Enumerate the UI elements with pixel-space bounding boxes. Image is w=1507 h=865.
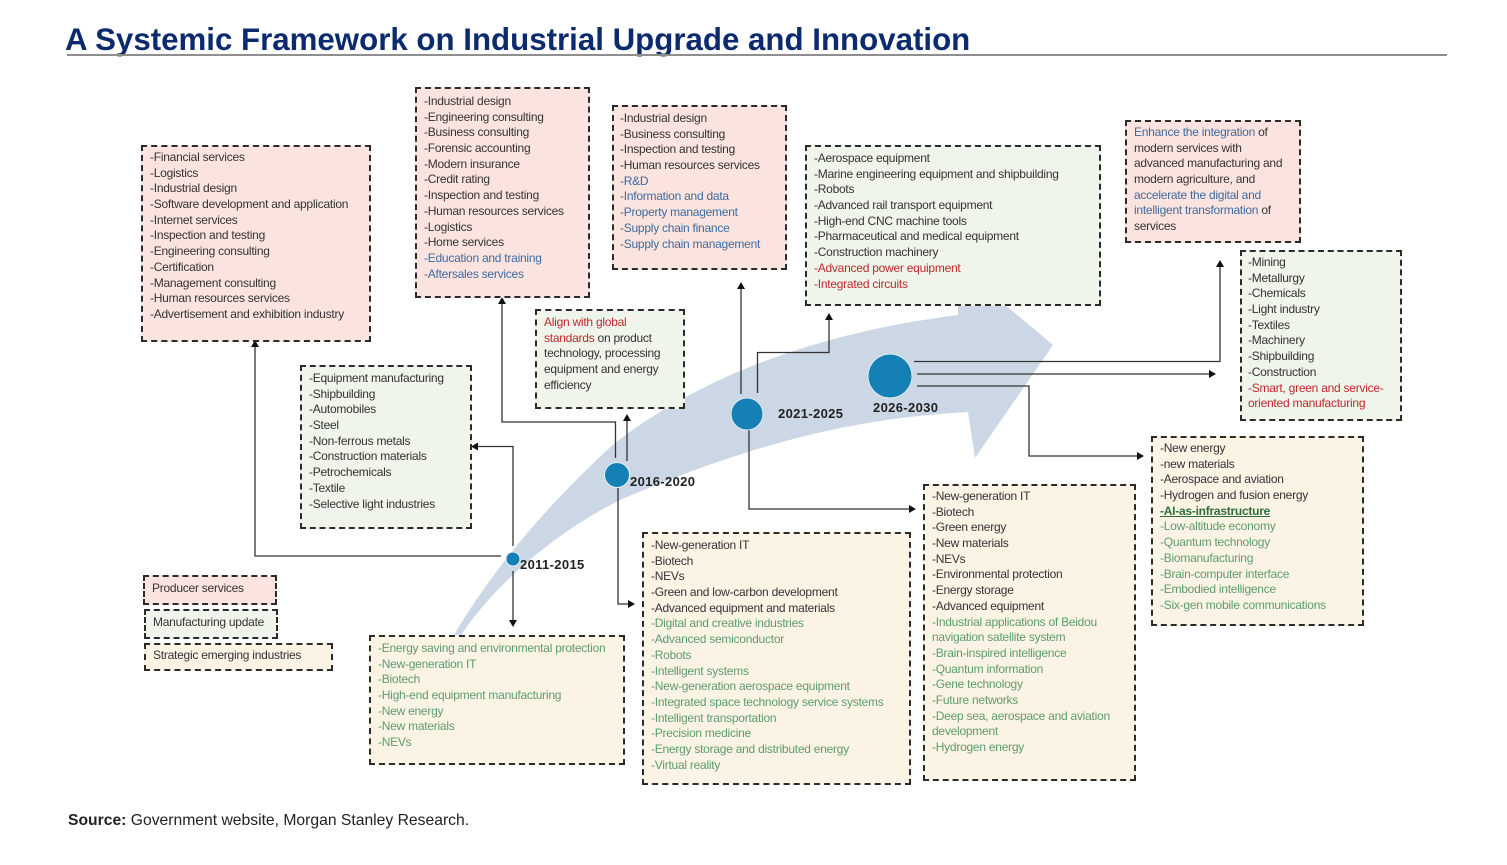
panel: strategic emerging industries 2026-2030: -Aerospace and aviation: [1160, 472, 1284, 486]
panel: producer services 2021-2025: [612, 105, 787, 270]
panel: manufacturing update 2026-2030: -Machinery: [1248, 333, 1305, 347]
panel: manufacturing update 2011-2015: -Equipment manufacturing: [309, 371, 444, 385]
panel: manufacturing update 2021-2025: -Marine engineering equipment and shipbuilding: [814, 167, 1059, 181]
panel: strategic emerging industries 2026-2030: -Hydrogen and fusion energy: [1160, 488, 1308, 502]
panel: strategic emerging industries 2026-2030: -Brain-computer interface: [1160, 566, 1289, 580]
arrowheads: [251, 260, 1224, 627]
panel: strategic emerging industries 2021-2025: -Advanced equipment: [932, 599, 1044, 613]
panel: strategic emerging industries 2011-2015: -New materials: [378, 719, 455, 733]
panel: producer services 2021-2025: -Business consulting: [620, 127, 725, 141]
panel: strategic emerging industries 2016-2020: -Robots: [651, 648, 691, 662]
panel: manufacturing update 2026-2030: -Light industry: [1248, 302, 1320, 316]
panel: strategic emerging industries 2016-2020: -Intelligent systems: [651, 664, 749, 678]
panel: strategic emerging industries 2021-2025: -Deep sea, aerospace and aviation: [932, 709, 1110, 723]
legend: manufacturing update: Manufacturing update: [153, 615, 264, 629]
panel: producer services 2026-2030: Enhance the integration of: [1134, 125, 1268, 139]
panel: producer services 2016-2020: -Modern insurance: [424, 157, 520, 171]
panel: manufacturing update 2021-2025: -Robots: [814, 182, 854, 196]
panel: strategic emerging industries 2026-2030: -Low-altitude economy: [1160, 519, 1275, 533]
panel: producer services 2016-2020: -Business consulting: [424, 125, 529, 139]
panel: producer services 2021-2025: -Property management: [620, 205, 738, 219]
panel: strategic emerging industries 2021-2025: -New-generation IT: [932, 489, 1030, 503]
panel: strategic emerging industries 2016-2020: -NEVs: [651, 569, 684, 583]
panel: manufacturing update 2021-2025: -Construction machinery: [814, 245, 938, 259]
big curved timeline arrow: [453, 303, 1053, 637]
panel: strategic emerging industries 2021-2025: -Energy storage: [932, 583, 1014, 597]
panel: strategic emerging industries 2016-2020: -Digital and creative industries: [651, 616, 804, 630]
panel: producer services 2016-2020: -Engineering consulting: [424, 110, 544, 124]
panel: strategic emerging industries 2021-2025: -Quantum information: [932, 662, 1043, 676]
panel: producer services 2016-2020: [415, 87, 590, 298]
panel: strategic emerging industries 2011-2015: -New energy: [378, 704, 443, 718]
panel: strategic emerging industries 2026-2030: -new materials: [1160, 457, 1235, 471]
panel: strategic emerging industries 2026-2030: [1151, 436, 1364, 626]
panel: producer services 2021-2025: -Supply chain management: [620, 236, 760, 250]
panel: strategic emerging industries 2011-2015: -High-end equipment manufacturing: [378, 688, 561, 702]
panel: producer services 2011-2015: -Engineering consulting: [150, 244, 270, 258]
panel: producer services 2016-2020: -Industrial design: [424, 94, 511, 108]
panel: strategic emerging industries 2011-2015: -NEVs: [378, 735, 411, 749]
panel: manufacturing update 2011-2015: -Petrochemicals: [309, 465, 391, 479]
panel: manufacturing update 2026-2030: -Construction: [1248, 365, 1316, 379]
panel: producer services 2021-2025: -Information and data: [620, 189, 729, 203]
panel: strategic emerging industries 2026-2030: -Six-gen mobile communications: [1160, 598, 1326, 612]
source note: Source: Government website, Morgan Stanley Research.: [68, 812, 469, 829]
panel: strategic emerging industries 2016-2020: -Integrated space technology service systems: [651, 695, 883, 709]
panel: strategic emerging industries 2016-2020: -Biotech: [651, 554, 693, 568]
panel: strategic emerging industries 2016-2020: -New-generation IT: [651, 538, 749, 552]
panel: strategic emerging industries 2016-2020: -Virtual reality: [651, 758, 720, 772]
panel: strategic emerging industries 2026-2030: -AI-as-infrastructure: [1160, 504, 1270, 518]
panel: producer services 2026-2030: intelligent transformation of: [1134, 203, 1271, 217]
title: A Systemic Framework on Industrial Upgrade and Innovation: [65, 22, 970, 57]
panel: manufacturing update 2016-2020: technology, processing: [544, 346, 660, 360]
panel: manufacturing update 2026-2030: [1240, 250, 1402, 421]
legend: producer services: Producer services: [152, 581, 244, 595]
panel: producer services 2011-2015: -Advertisement and exhibition industry: [150, 307, 344, 321]
panel: producer services 2011-2015: -Human resources services: [150, 291, 290, 305]
panel: producer services 2016-2020: -Education and training: [424, 251, 542, 265]
panel: producer services 2011-2015: -Financial services: [150, 150, 245, 164]
panel: manufacturing update 2021-2025: -Aerospace equipment: [814, 151, 930, 165]
panel: strategic emerging industries 2011-2015: -Biotech: [378, 672, 420, 686]
panel: producer services 2016-2020: -Human resources services: [424, 204, 564, 218]
timeline milestone circles: [506, 354, 912, 566]
panel: manufacturing update 2026-2030: -Textiles: [1248, 318, 1290, 332]
panel: manufacturing update 2016-2020: standards on product: [544, 331, 652, 345]
panel: manufacturing update 2011-2015: -Shipbuilding: [309, 387, 375, 401]
panel: strategic emerging industries 2021-2025: -Green energy: [932, 520, 1006, 534]
panel: manufacturing update 2021-2025: [805, 145, 1101, 306]
panel: manufacturing update 2021-2025: -High-end CNC machine tools: [814, 214, 967, 228]
panel: producer services 2011-2015: -Logistics: [150, 166, 198, 180]
panel: producer services 2011-2015: [141, 145, 371, 342]
panel: manufacturing update 2016-2020: efficiency: [544, 378, 591, 392]
panel: strategic emerging industries 2021-2025: navigation satellite system: [932, 630, 1065, 644]
panel: strategic emerging industries 2016-2020: -Energy storage and distributed energy: [651, 742, 849, 756]
panel: producer services 2021-2025: -Supply chain finance: [620, 221, 730, 235]
panel: manufacturing update 2011-2015: [300, 365, 472, 529]
panel: manufacturing update 2011-2015: -Non-ferrous metals: [309, 434, 410, 448]
panel: producer services 2021-2025: -Industrial design: [620, 111, 707, 125]
legend: producer services: [143, 575, 277, 605]
panel: producer services 2026-2030: [1125, 120, 1301, 243]
panel: strategic emerging industries 2011-2015: [369, 635, 625, 765]
panel: manufacturing update 2016-2020: Align with global: [544, 315, 626, 329]
panel: strategic emerging industries 2016-2020: -Green and low-carbon development: [651, 585, 838, 599]
panel: strategic emerging industries 2016-2020: -Advanced semiconductor: [651, 632, 784, 646]
panel: strategic emerging industries 2011-2015: -Energy saving and environmental protection: [378, 641, 605, 655]
panel: producer services 2016-2020: -Aftersales services: [424, 267, 524, 281]
panel: producer services 2026-2030: advanced manufacturing and: [1134, 156, 1282, 170]
panel: strategic emerging industries 2021-2025: -Gene technology: [932, 677, 1023, 691]
panel: manufacturing update 2026-2030: -Metallurgy: [1248, 271, 1305, 285]
connectors from 2011-2015: [255, 266, 1220, 622]
panel: manufacturing update 2026-2030: -Mining: [1248, 255, 1286, 269]
panel: strategic emerging industries 2021-2025: -New materials: [932, 536, 1009, 550]
legend: strategic emerging industries: Strategic emerging industries: [153, 648, 301, 662]
panel: strategic emerging industries 2026-2030: -Embodied intelligence: [1160, 582, 1276, 596]
panel: producer services 2021-2025: -Inspection and testing: [620, 142, 735, 156]
panel: producer services 2016-2020: -Credit rating: [424, 172, 490, 186]
panel: producer services 2021-2025: -R&D: [620, 174, 648, 188]
panel: strategic emerging industries 2021-2025: -Biotech: [932, 505, 974, 519]
panel: strategic emerging industries 2026-2030: -Biomanufacturing: [1160, 551, 1253, 565]
year label 2011-2015: 2011-2015: [520, 557, 585, 572]
panel: manufacturing update 2026-2030: oriented manufacturing: [1248, 396, 1365, 410]
panel: producer services 2026-2030: accelerate the digital and: [1134, 188, 1261, 202]
panel: producer services 2011-2015: -Internet services: [150, 213, 238, 227]
panel: producer services 2016-2020: -Forensic accounting: [424, 141, 530, 155]
panel: manufacturing update 2026-2030: -Shipbuilding: [1248, 349, 1314, 363]
panel: producer services 2021-2025: -Human resources services: [620, 158, 760, 172]
panel: manufacturing update 2026-2030: -Chemicals: [1248, 286, 1306, 300]
panel: manufacturing update 2021-2025: -Integrated circuits: [814, 276, 908, 290]
panel: manufacturing update 2016-2020: [535, 309, 685, 409]
panel: manufacturing update 2011-2015: -Construction materials: [309, 449, 427, 463]
panel: strategic emerging industries 2016-2020: -Intelligent transportation: [651, 711, 776, 725]
panel: strategic emerging industries 2011-2015: -New-generation IT: [378, 657, 476, 671]
panel: producer services 2016-2020: -Logistics: [424, 220, 472, 234]
panel: strategic emerging industries 2021-2025: development: [932, 724, 998, 738]
panel: producer services 2011-2015: -Inspection and testing: [150, 228, 265, 242]
panel: producer services 2011-2015: -Certification: [150, 260, 214, 274]
year label 2016-2020: 2016-2020: [630, 474, 695, 489]
panel: producer services 2016-2020: -Home services: [424, 235, 504, 249]
panel: producer services 2011-2015: -Software development and application: [150, 197, 348, 211]
title underline: [67, 54, 1447, 56]
panel: manufacturing update 2021-2025: -Pharmaceutical and medical equipment: [814, 229, 1019, 243]
panel: strategic emerging industries 2021-2025: -Industrial applications of Beidou: [932, 614, 1097, 628]
year label 2021-2025: 2021-2025: [778, 406, 843, 421]
panel: producer services 2016-2020: -Inspection and testing: [424, 188, 539, 202]
panel: strategic emerging industries 2026-2030: -Quantum technology: [1160, 535, 1270, 549]
panel: producer services 2011-2015: -Industrial design: [150, 181, 237, 195]
panel: strategic emerging industries 2026-2030: -New energy: [1160, 441, 1225, 455]
panel: manufacturing update 2011-2015: -Selective light industries: [309, 496, 435, 510]
year label 2026-2030: 2026-2030: [873, 400, 938, 415]
panel: strategic emerging industries 2021-2025: -Hydrogen energy: [932, 740, 1024, 754]
panel: manufacturing update 2011-2015: -Textile: [309, 481, 345, 495]
panel: strategic emerging industries 2016-2020: -Advanced equipment and materials: [651, 601, 835, 615]
panel: producer services 2026-2030: modern agriculture, and: [1134, 172, 1255, 186]
panel: strategic emerging industries 2021-2025: -NEVs: [932, 552, 965, 566]
panel: strategic emerging industries 2021-2025: -Future networks: [932, 693, 1018, 707]
panel: strategic emerging industries 2016-2020: -New-generation aerospace equipment: [651, 679, 850, 693]
panel: manufacturing update 2011-2015: -Steel: [309, 418, 339, 432]
panel: strategic emerging industries 2016-2020: [642, 532, 911, 785]
panel: manufacturing update 2021-2025: -Advanced power equipment: [814, 261, 961, 275]
panel: manufacturing update 2016-2020: equipment and energy: [544, 362, 658, 376]
panel: manufacturing update 2011-2015: -Automobiles: [309, 402, 376, 416]
panel: producer services 2011-2015: -Management consulting: [150, 276, 276, 290]
panel: manufacturing update 2026-2030: -Smart, green and service-: [1248, 380, 1384, 394]
panel: strategic emerging industries 2016-2020: -Precision medicine: [651, 726, 751, 740]
legend: manufacturing update: [144, 609, 278, 639]
legend: strategic emerging industries: [144, 643, 333, 671]
panel: producer services 2026-2030: services: [1134, 219, 1176, 233]
panel: strategic emerging industries 2021-2025: -Environmental protection: [932, 567, 1062, 581]
panel: strategic emerging industries 2021-2025: [923, 484, 1136, 781]
panel: manufacturing update 2021-2025: -Advanced rail transport equipment: [814, 198, 992, 212]
panel: strategic emerging industries 2021-2025: -Brain-inspired intelligence: [932, 646, 1066, 660]
panel: producer services 2026-2030: modern services with: [1134, 141, 1242, 155]
